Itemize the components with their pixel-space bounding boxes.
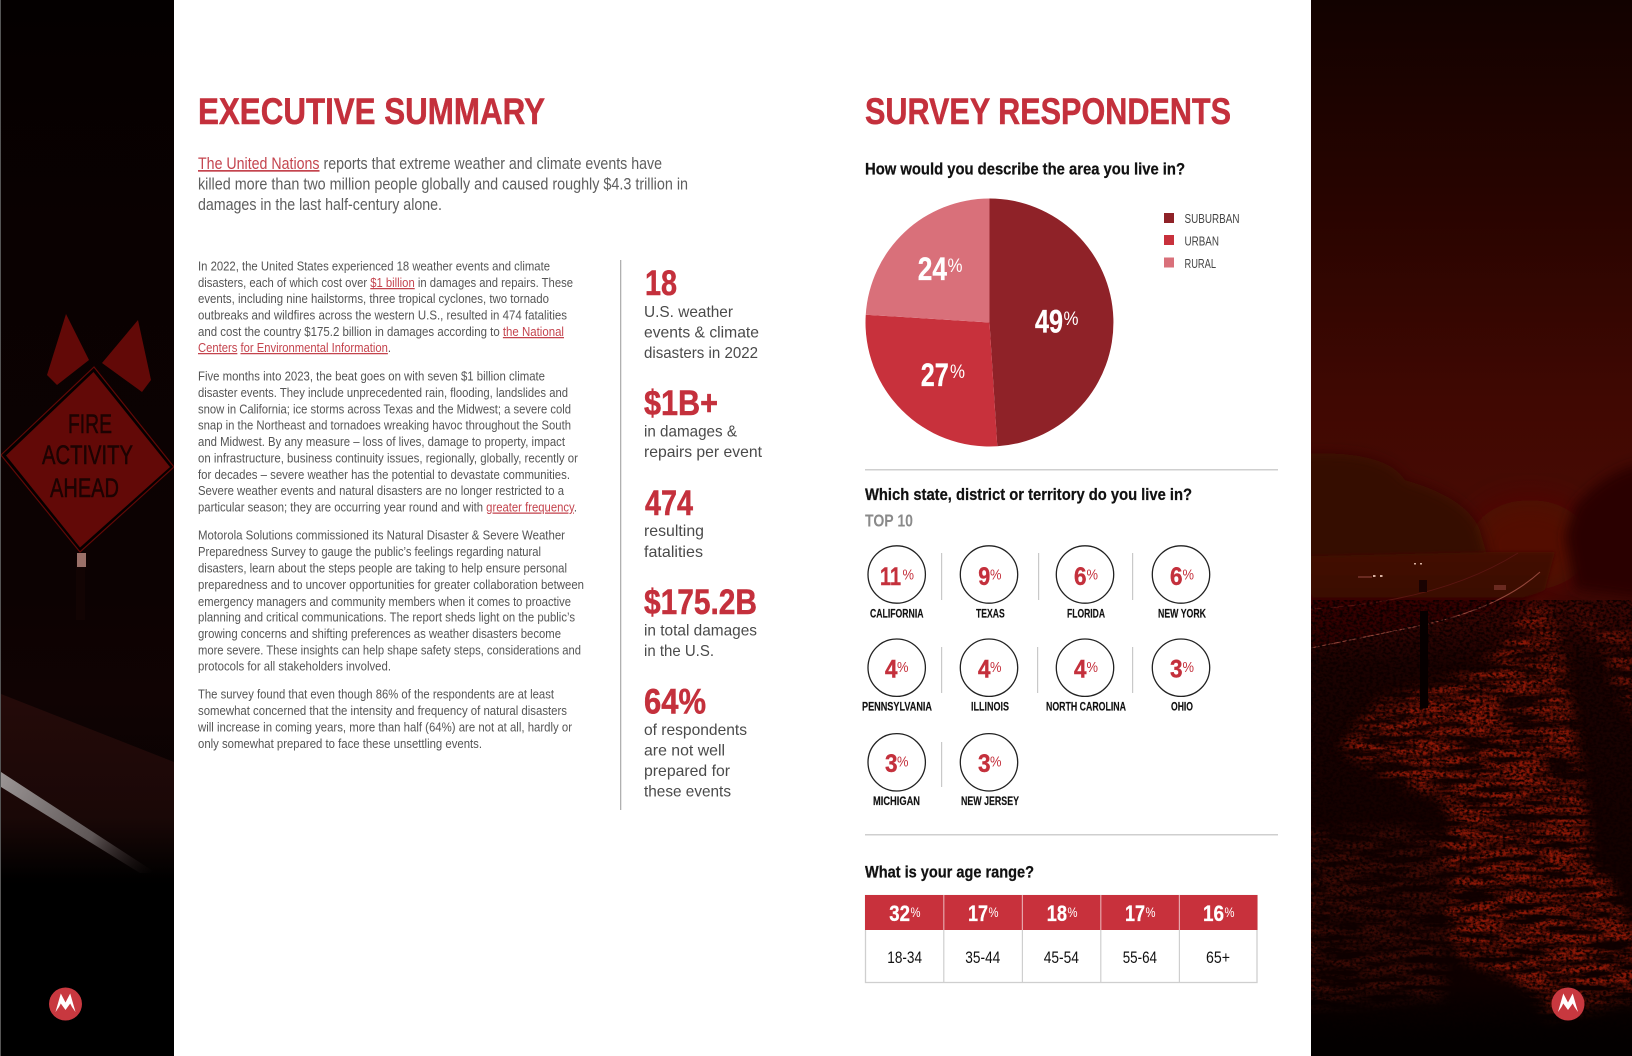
stat: 474 fatalities: resulting: [644, 523, 704, 540]
age column: 18-34: 18-34: [887, 948, 922, 967]
text block: body paragraph 3: growing concerns and shifting preferences as weather disasters become: [198, 627, 561, 641]
state: California: CALIFORNIA: [870, 608, 924, 620]
legend: area type: SUBURBAN: [1184, 211, 1240, 226]
stat: 18 events: disasters in 2022: [644, 345, 758, 362]
state: North Carolina: NORTH CAROLINA: [1046, 702, 1126, 714]
stat: $175.2B total: in the U.S.: [644, 643, 714, 660]
text block: body paragraph 2: particular season; they are occurring year round and with greater frequency.: [198, 500, 577, 514]
age column: 65+: 65+: [1206, 948, 1230, 967]
text block: body paragraph 2: on infrastructure, business continuity issues, regionally, globally, recently or: [198, 452, 578, 466]
age column: 55-64: %: [1146, 904, 1156, 920]
icon: motorola logo right: [1552, 988, 1584, 1020]
age column: 45-54: 45-54: [1044, 948, 1079, 967]
state: Pennsylvania: %: [897, 659, 908, 676]
age column: 45-54: 18: [1047, 901, 1067, 926]
state: Michigan: %: [897, 754, 908, 770]
age column: 18-34: %: [910, 904, 920, 920]
panel: right photo of smoky highway: [1290, 0, 1632, 1056]
text block: body paragraph 1: In 2022, the United States experienced 18 weather events and climate: [198, 260, 550, 274]
stat: $175.2B total: in total damages: [644, 622, 757, 640]
state: Ohio: %: [1182, 659, 1194, 676]
text block: lead paragraph: killed more than two million people globally and caused roughly $4.3 trillion in: [198, 174, 688, 194]
heading: state question: Which state, district or territory do you live in?: [865, 485, 1192, 504]
heading: survey respondents: SURVEY RESPONDENTS: [865, 90, 1231, 132]
chart: top 10 states: [862, 546, 1210, 808]
stat: $1B+ per event: repairs per event: [644, 444, 763, 461]
state: Ohio: OHIO: [1171, 702, 1193, 714]
legend: area type: [1164, 211, 1240, 271]
stat: 64% not prepared: of respondents: [644, 722, 747, 739]
fire activity road sign: ACTIVITY: [42, 440, 133, 470]
state: Illinois: ILLINOIS: [971, 702, 1009, 714]
text block: body paragraph 2: Five months into 2023, the beat goes on with seven $1 billion climate: [198, 370, 545, 384]
text block: body paragraph 4: The survey found that even though 86% of the respondents are at least: [198, 688, 554, 702]
stat: $175.2B total: [644, 583, 757, 660]
age column: 45-54: [1044, 901, 1079, 967]
stat: 474 fatalities: fatalities: [644, 544, 703, 561]
state: New Jersey: [960, 734, 1019, 808]
age column: 55-64: [1123, 901, 1157, 967]
icon: motorola logo left: [49, 988, 82, 1020]
legend: area type: URBAN: [1184, 234, 1219, 248]
text block: body paragraph 2: and Midwest. By any measure – loss of lives, damage to property, impact: [198, 435, 565, 449]
pie label: 49 percent: %: [1064, 309, 1079, 330]
age column: 18-34: 32: [889, 901, 910, 926]
icon: warning flags: [47, 314, 151, 392]
state: Illinois: [960, 639, 1018, 714]
panel: key statistics: [644, 264, 763, 800]
heading: executive summary: EXECUTIVE SUMMARY: [198, 90, 545, 132]
state: Florida: %: [1086, 566, 1098, 584]
stat: $1B+ per event: $1B+: [644, 384, 718, 423]
text block: body paragraph 4: will increase in coming years, more than half (64%) are not at all, hardly or: [197, 720, 572, 734]
stat: 18 events: U.S. weather: [644, 304, 734, 321]
legend: area type: RURAL: [1184, 256, 1216, 271]
text block: body paragraph 3: emergency managers and community members when it comes to proactive: [198, 595, 571, 609]
state: Michigan: MICHIGAN: [873, 796, 920, 808]
state: Pennsylvania: [862, 639, 932, 714]
age column: 18-34: [887, 901, 922, 967]
state: New York: 6: [1170, 563, 1182, 591]
state: New Jersey: %: [990, 754, 1002, 770]
state: North Carolina: %: [1086, 659, 1098, 676]
age column: 35-44: %: [988, 904, 998, 920]
pie label: 24 percent: 24: [918, 251, 947, 287]
text block: body paragraph 3: [198, 528, 584, 674]
field grass streaks: [1300, 604, 1632, 1020]
pie label: 27 percent: %: [950, 362, 965, 383]
text block: body paragraph 1: [198, 260, 573, 355]
age column: 65+: [1203, 901, 1234, 967]
age column: 45-54: %: [1068, 904, 1078, 920]
text block: body paragraph 3: Motorola Solutions commissioned its Natural Disaster & Severe Weather: [198, 528, 565, 542]
age column: 55-64: 55-64: [1123, 948, 1157, 967]
age column: 55-64: 17: [1125, 901, 1145, 926]
state: Ohio: 3: [1170, 656, 1182, 684]
pie label: 27 percent: 27: [921, 357, 949, 393]
text block: body paragraph 1: outbreaks and wildfires across the western U.S., resulted in 474 fatalities: [198, 308, 567, 322]
state: California: [868, 546, 925, 620]
text block: body paragraph 4: somewhat concerned that the intensity and frequency of natural disasters: [198, 704, 567, 718]
text block: body paragraph 2: Severe weather events and natural disasters are no longer restricted to a: [198, 484, 564, 498]
state: New York: NEW YORK: [1158, 608, 1207, 620]
state: California: %: [902, 566, 914, 584]
heading: area question: How would you describe the area you live in?: [865, 160, 1185, 178]
state: California: 11: [880, 563, 901, 591]
fire activity road sign: [1, 366, 174, 567]
state: North Carolina: 4: [1074, 656, 1087, 684]
text block: body paragraph 4: only somewhat prepared to face these unsettling events.: [198, 737, 482, 751]
text block: body paragraph 2: snap in the Northeast and tornadoes wreaking havoc throughout the South: [198, 418, 571, 432]
stat: 474 fatalities: 474: [645, 484, 693, 523]
stat: 18 events: [644, 264, 759, 362]
stat: $1B+ per event: [644, 384, 763, 461]
text block: body paragraph 3: preparedness and to uncover opportunities for greater collaboration between: [198, 578, 584, 592]
state: North Carolina: [1046, 639, 1126, 714]
stat: 64% not prepared: 64%: [644, 682, 706, 722]
state: Pennsylvania: 4: [885, 656, 898, 684]
state: Florida: 6: [1074, 563, 1086, 591]
stat: 64% not prepared: these events: [644, 784, 731, 800]
stat: 474 fatalities: [644, 484, 704, 561]
text block: body paragraph 3: more severe. These insights can help shape safety steps, considerations and: [198, 644, 581, 658]
text block: body paragraph 1: and cost the country $175.2 billion in damages according to the National: [198, 325, 564, 339]
text block: body paragraph 1: Centers for Environmental Information.: [198, 341, 391, 355]
state: Michigan: [868, 734, 925, 808]
text block: body paragraph 2: for decades – severe weather has the potential to devastate communities.: [198, 468, 570, 482]
heading: age question: What is your age range?: [865, 862, 1034, 881]
age column: 35-44: [965, 901, 1000, 967]
text block: body paragraph 3: protocols for all stakeholders involved.: [198, 660, 391, 674]
pie label: 24 percent: %: [948, 256, 963, 277]
state: Texas: TEXAS: [976, 608, 1005, 620]
text block: body paragraph 2: disaster events. They include unprecedented rain, flooding, landslides and: [198, 386, 568, 400]
age column: 35-44: 17: [968, 901, 988, 926]
fire activity road sign: AHEAD: [50, 473, 119, 503]
text block: body paragraph 3: disasters, learn about the steps people are taking to help ensure personal: [198, 562, 567, 576]
state: New York: %: [1182, 566, 1194, 584]
state: New York: [1152, 546, 1210, 620]
text block: body paragraph 1: events, including nine hailstorms, three tropical cyclones, two tornado: [198, 292, 549, 306]
age column: 35-44: 35-44: [965, 948, 1000, 967]
fine grain: [1311, 600, 1632, 1056]
text block: body paragraph 3: Preparedness Survey to gauge the public’s feelings regarding natural: [198, 545, 541, 559]
panel: left photo of fire activity sign: [0, 0, 174, 1056]
stat: 64% not prepared: [644, 682, 747, 800]
fire activity road sign: FIRE: [68, 409, 112, 439]
state: Texas: %: [990, 566, 1002, 584]
pie label: 49 percent: 49: [1035, 304, 1063, 340]
state: Florida: FLORIDA: [1067, 608, 1105, 620]
age column: 65+: 16: [1203, 901, 1224, 926]
subheading: top 10: TOP 10: [865, 511, 913, 531]
text block: body paragraph 2: snow in California; ice storms across Texas and the Midwest; a severe cold: [198, 402, 571, 416]
state: New Jersey: 3: [978, 750, 990, 778]
text block: body paragraph 4: [197, 688, 572, 751]
state: Pennsylvania: PENNSYLVANIA: [862, 702, 932, 714]
stat: 18 events: 18: [645, 264, 677, 303]
state: Texas: 9: [978, 563, 990, 591]
text block: lead paragraph: [198, 154, 688, 214]
stat: 64% not prepared: are not well: [644, 742, 725, 760]
text block: body paragraph 2: [198, 370, 578, 514]
text block: lead paragraph: damages in the last half-century alone.: [198, 195, 442, 214]
state: New Jersey: NEW JERSEY: [961, 796, 1019, 808]
stat: $175.2B total: $175.2B: [644, 583, 757, 622]
state: Florida: [1056, 546, 1114, 620]
table: age range: [865, 895, 1258, 982]
stat: 18 events: events & climate: [644, 324, 759, 342]
pie chart: area type: [866, 198, 1113, 446]
stat: $1B+ per event: in damages &: [644, 424, 737, 440]
state: Texas: [960, 546, 1018, 620]
state: Ohio: [1152, 639, 1210, 714]
state: Illinois: %: [990, 659, 1002, 676]
text block: body paragraph 1: disasters, each of which cost over $1 billion in damages and repairs. These: [198, 276, 573, 290]
stat: 64% not prepared: prepared for: [644, 763, 731, 780]
age column: 65+: %: [1224, 904, 1234, 920]
state: Illinois: 4: [978, 656, 991, 684]
state: Michigan: 3: [885, 750, 898, 778]
text block: body paragraph 3: planning and critical communications. The report sheds light on the public’s: [198, 610, 575, 624]
text block: lead paragraph: The United Nations reports that extreme weather and climate events have: [198, 154, 662, 173]
